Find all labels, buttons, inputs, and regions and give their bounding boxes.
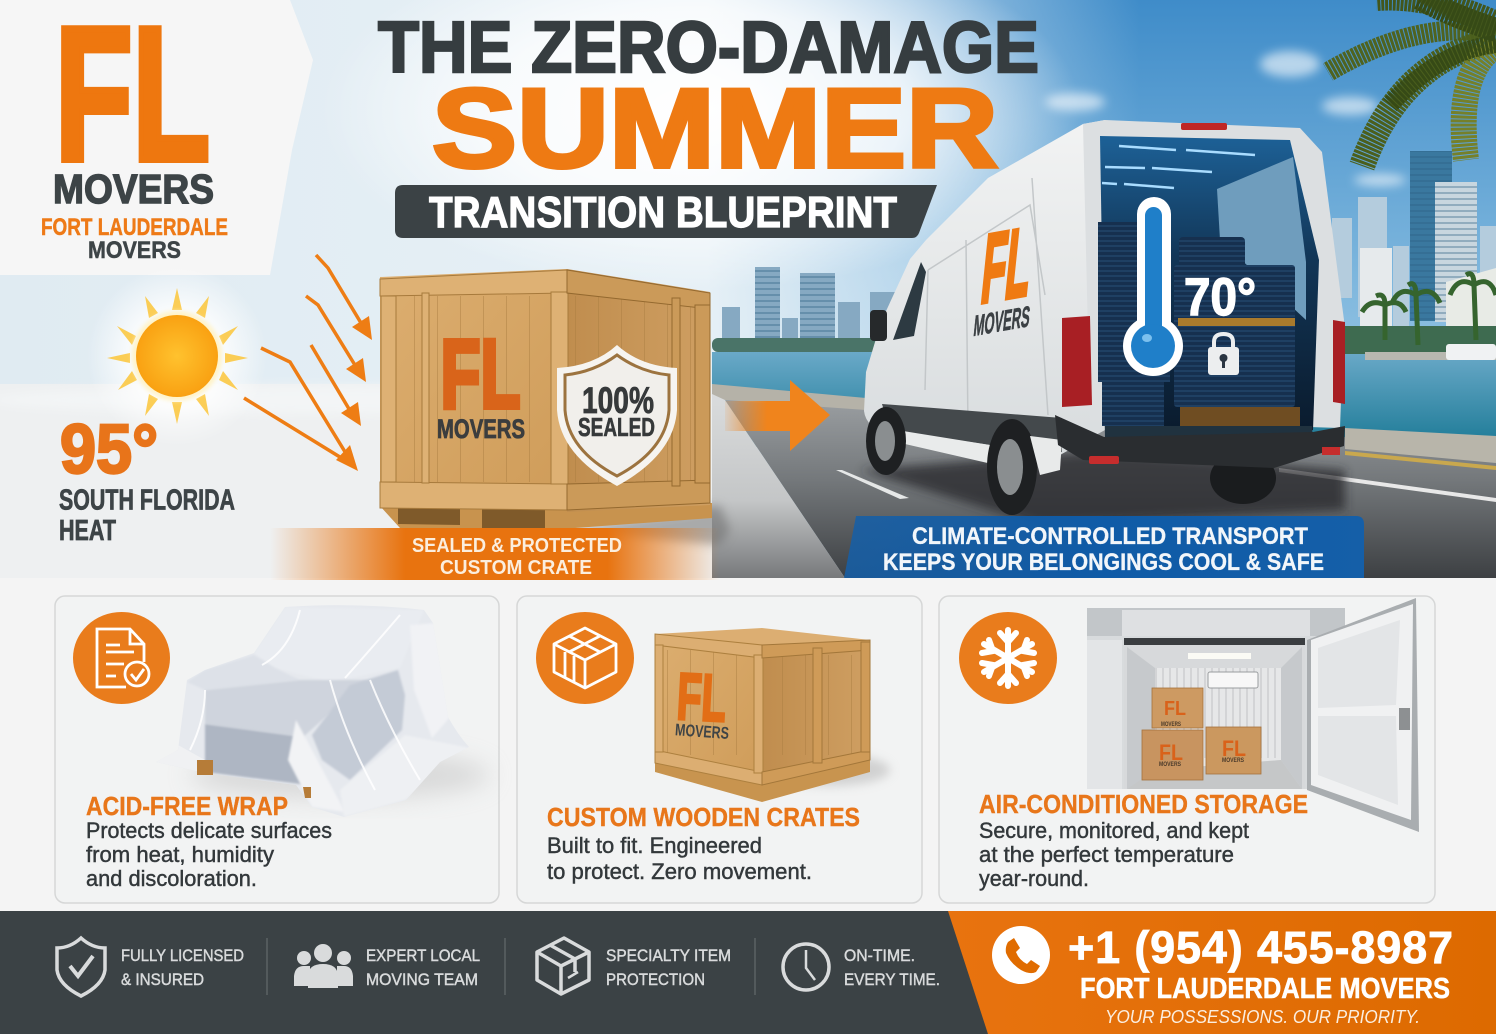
side face	[567, 269, 710, 512]
heading: CUSTOM WOODEN CRATES	[547, 802, 860, 832]
right curb	[1345, 428, 1496, 463]
description: Protects delicate surfaces	[86, 818, 332, 843]
title line 2: SUMMER	[432, 66, 998, 191]
delivery van	[860, 120, 1345, 525]
right skyline	[1332, 151, 1496, 360]
shadow	[560, 505, 730, 545]
description: at the perfect temperature	[979, 842, 1234, 867]
badge: team: EXPERT LOCAL	[366, 946, 480, 965]
side window	[893, 262, 926, 340]
panel: custom wooden crates	[517, 596, 922, 903]
description: year-round.	[979, 866, 1089, 891]
icon: parcel	[537, 938, 589, 994]
description: Built to fit. Engineered	[547, 833, 762, 858]
bumper	[1055, 415, 1345, 468]
heat arrows	[244, 255, 372, 471]
storage unit: FL	[1222, 736, 1246, 761]
large palm fronds	[1328, 0, 1496, 166]
clouds	[1045, 51, 1406, 186]
temperature 95	[59, 410, 235, 547]
badge: specialty	[537, 938, 731, 994]
right rear wheel	[1210, 452, 1276, 504]
description	[547, 833, 812, 884]
icon: phone	[992, 926, 1050, 984]
description: Secure, monitored, and kept	[979, 818, 1249, 843]
water	[712, 352, 1496, 447]
subtitle banner	[395, 185, 937, 238]
storage unit: MOVERS	[1159, 762, 1181, 768]
icon: shield	[57, 938, 105, 996]
title	[378, 8, 1039, 238]
description	[979, 818, 1249, 891]
shield badge	[557, 345, 677, 486]
crate FL: FL	[675, 659, 728, 735]
badge: licensed: & INSURED	[121, 970, 204, 989]
company name: FORT LAUDERDALE MOVERS	[1080, 973, 1450, 1005]
badge: specialty: SPECIALTY ITEM	[606, 946, 731, 965]
pavement	[712, 384, 845, 578]
subtitle text: TRANSITION BLUEPRINT	[429, 188, 897, 237]
badge: on-time: ON-TIME.	[844, 946, 915, 965]
footer orange block	[948, 911, 1496, 1034]
caption line 2: CUSTOM CRATE	[440, 557, 592, 579]
blanket stacks	[1098, 222, 1295, 426]
chair under plastic	[178, 605, 486, 817]
panel: air-conditioned storage	[939, 596, 1435, 903]
side wheel	[987, 419, 1037, 515]
phone number: +1 (954) 455-8987	[1068, 922, 1453, 973]
AC unit	[1208, 672, 1258, 688]
100 percent: 100%	[582, 380, 654, 421]
footer bar	[0, 911, 1496, 1034]
icon: box	[536, 612, 634, 704]
storage unit: FL	[1164, 698, 1186, 720]
thermometer	[1123, 197, 1183, 376]
sheet folds	[190, 610, 420, 790]
mirror	[870, 310, 887, 341]
storage unit	[1087, 598, 1419, 832]
rails	[380, 270, 568, 510]
icon: lock	[1208, 334, 1239, 375]
front wheel	[866, 407, 906, 475]
badge: team	[294, 944, 480, 989]
icon: snowflake	[959, 612, 1057, 704]
back wall	[1217, 157, 1306, 320]
south florida: SOUTH FLORIDA	[59, 484, 235, 516]
road	[725, 400, 1496, 578]
van FL logo	[972, 205, 1041, 343]
caption line 1: CLIMATE-CONTROLLED TRANSPORT	[912, 523, 1308, 550]
hero scene background	[0, 0, 1496, 578]
door	[1307, 598, 1419, 832]
chair legs	[197, 760, 213, 775]
description	[86, 818, 332, 891]
heat: HEAT	[59, 515, 116, 547]
title line 1: THE ZERO-DAMAGE	[378, 8, 1039, 88]
heading: AIR-CONDITIONED STORAGE	[979, 789, 1308, 819]
caption line 1: SEALED & PROTECTED	[412, 535, 622, 557]
crate movers: MOVERS	[437, 414, 525, 444]
storage unit: FL	[1159, 740, 1183, 765]
95 degrees: 95°	[60, 410, 158, 488]
boxes	[1142, 688, 1261, 780]
70 degrees: 70°	[1184, 268, 1256, 327]
crate movers: MOVERS	[674, 720, 730, 743]
rear door frame	[1083, 120, 1344, 428]
storage unit: MOVERS	[1222, 758, 1244, 764]
LED lights	[1102, 146, 1255, 188]
sealed: SEALED	[578, 412, 655, 442]
badge: licensed: FULLY LICENSED	[121, 946, 244, 965]
crate caption band	[270, 528, 720, 580]
arrow to van	[725, 380, 830, 451]
wooden crate	[380, 269, 730, 545]
icon: people	[294, 944, 353, 988]
heading: ACID-FREE WRAP	[86, 791, 288, 821]
description: and discoloration.	[86, 866, 257, 891]
left skyline	[712, 267, 895, 352]
description: from heat, humidity	[86, 842, 274, 867]
icon: sun	[87, 266, 267, 446]
badge: licensed	[57, 938, 244, 996]
tagline: YOUR POSSESSIONS. OUR PRIORITY.	[1105, 1007, 1420, 1027]
lower skirt	[882, 404, 1062, 452]
description: to protect. Zero movement.	[547, 859, 812, 884]
badge: specialty: PROTECTION	[606, 970, 705, 989]
tail lights	[1062, 316, 1092, 407]
door lines	[925, 178, 1048, 430]
cargo interior	[1100, 136, 1319, 438]
logo sub movers: MOVERS	[88, 237, 181, 264]
dividers	[267, 938, 755, 995]
icon: clock	[783, 944, 829, 990]
plastic sheet	[178, 605, 468, 816]
badge: on-time: EVERY TIME.	[844, 970, 940, 989]
panel: acid-free wrap	[55, 596, 499, 903]
van FL logo: MOVERS	[972, 300, 1032, 343]
pallet	[380, 503, 712, 530]
logo Fort Lauderdale: FORT LAUDERDALE	[41, 214, 228, 241]
badge: team: MOVING TEAM	[366, 970, 478, 989]
van FL logo: FL	[977, 206, 1036, 324]
van shadow	[860, 450, 1345, 525]
wooden crate	[655, 628, 890, 802]
logo panel	[0, 0, 313, 275]
icon: document check	[73, 612, 170, 704]
logo MOVERS: MOVERS	[53, 166, 214, 212]
transport caption band	[844, 516, 1364, 578]
caption line 2: KEEPS YOUR BELONGINGS COOL & SAFE	[883, 549, 1324, 576]
road markings	[836, 470, 909, 499]
small palms	[1362, 274, 1496, 345]
van side body	[864, 120, 1105, 455]
front face	[380, 269, 567, 505]
crate FL: FL	[440, 320, 520, 428]
storage unit: MOVERS	[1161, 722, 1181, 728]
badge: on-time	[783, 944, 940, 990]
